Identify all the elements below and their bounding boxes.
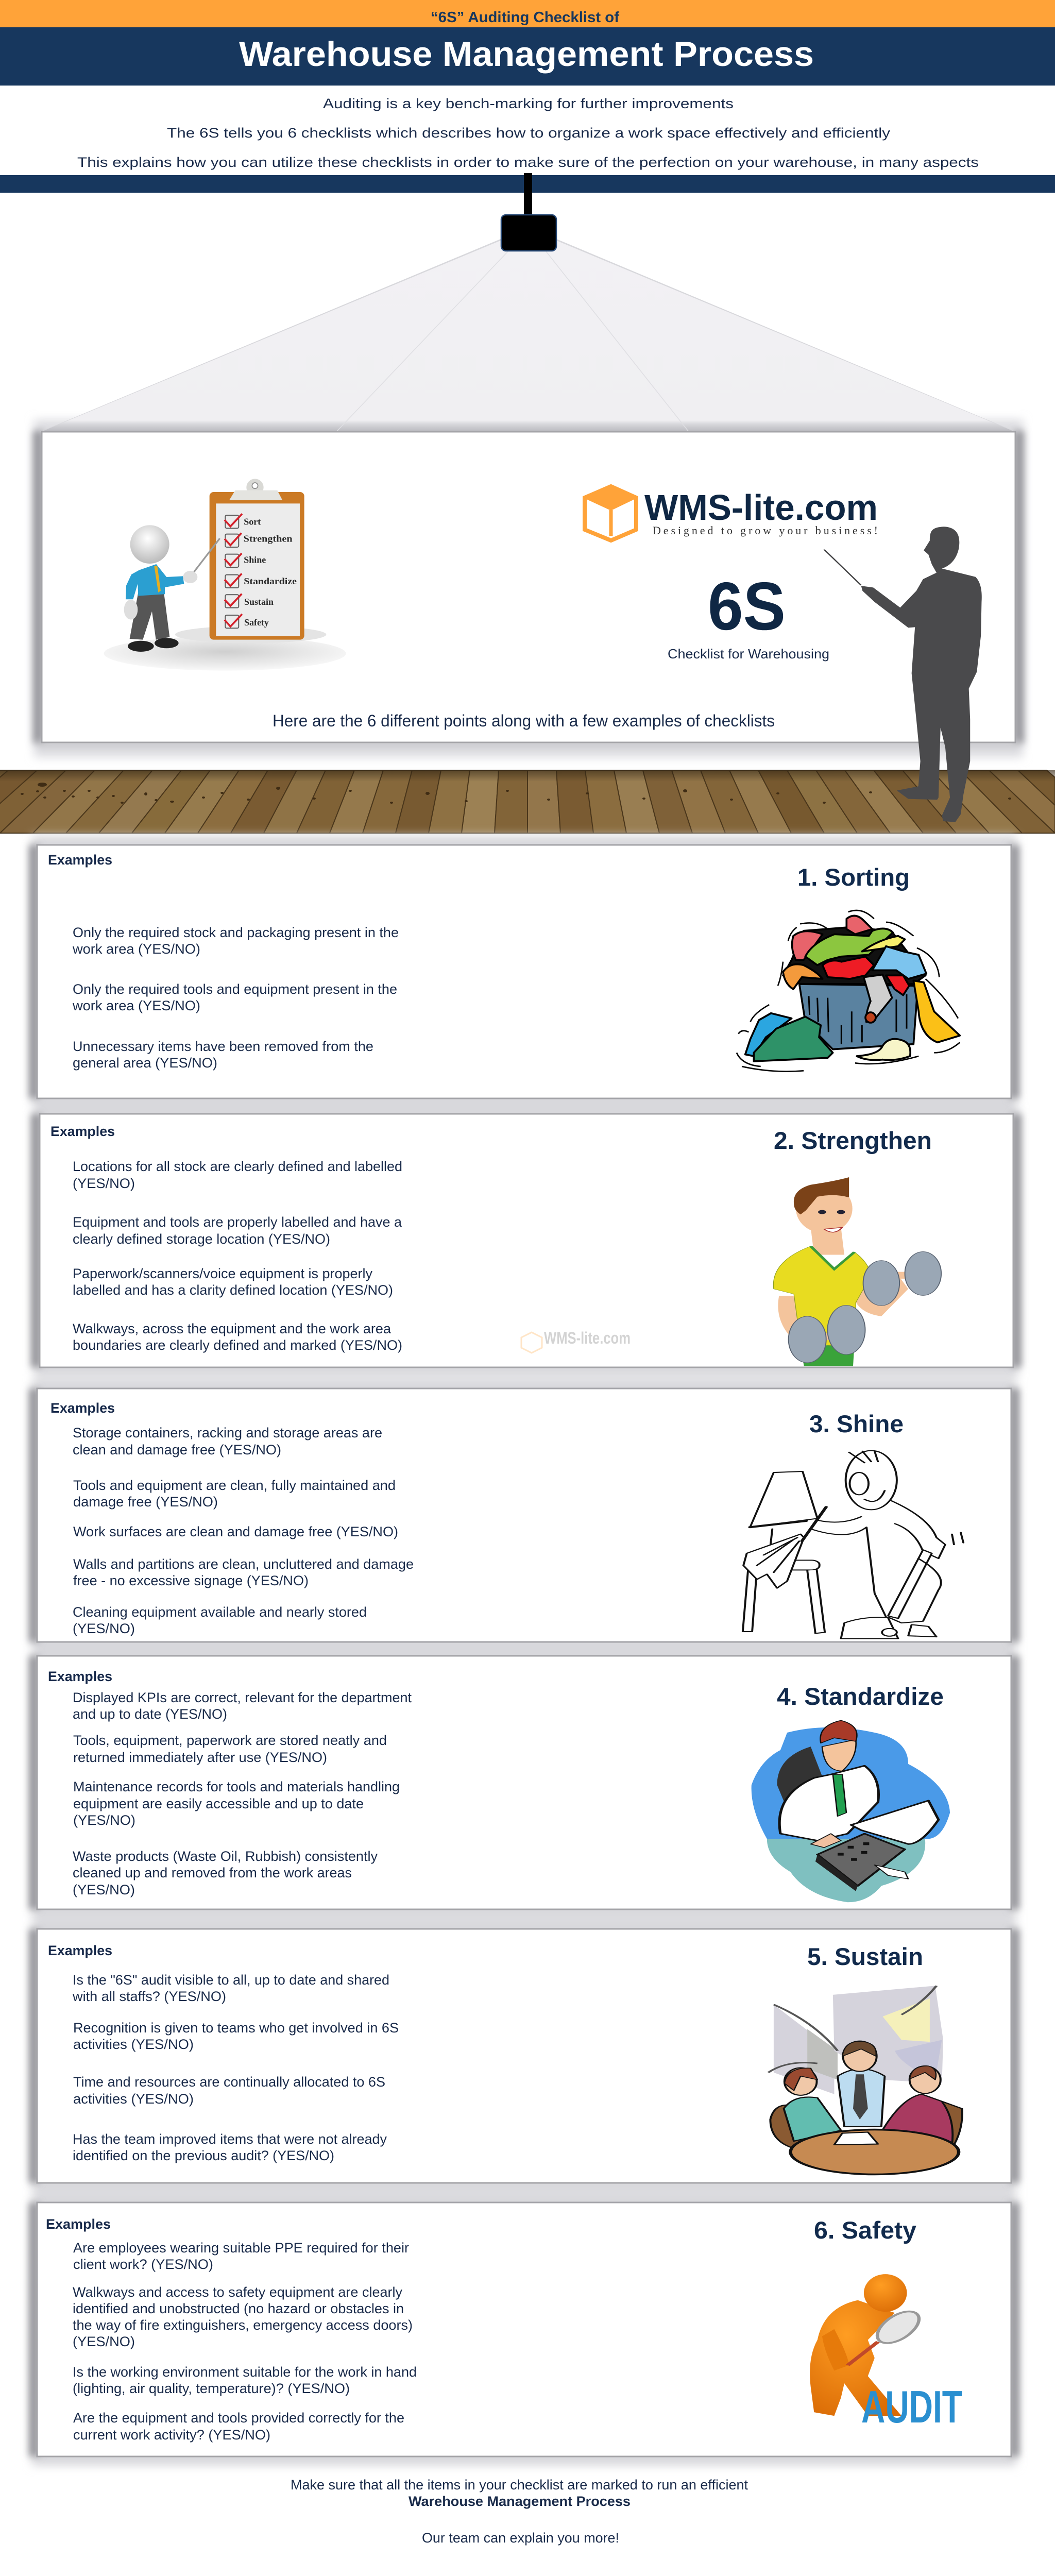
examples label: Examples: [48, 852, 112, 868]
checklist items: Displayed KPIs are correct, relevant for the department: [73, 1690, 412, 1705]
watermark logo: WMS-lite.com: [544, 1329, 631, 1347]
checklist items: Storage containers, racking and storage areas are: [73, 1425, 382, 1440]
panel: 4. Standardize: [37, 1656, 1011, 1909]
examples label: Examples: [46, 2216, 111, 2232]
checklist items: (YES/NO): [73, 1882, 135, 1897]
checklist items: [72, 925, 399, 1071]
checklist items: activities (YES/NO): [73, 2091, 194, 2107]
checklist items: and up to date (YES/NO): [73, 1706, 227, 1722]
illustration: figure with checklist: Safety: [244, 617, 269, 628]
AUDIT word: AUDIT: [861, 2381, 962, 2432]
illustration: laundry basket: [737, 910, 960, 1072]
checklist items: Work surfaces are clean and damage free (YES/NO): [73, 1524, 398, 1539]
panel: 5. Sustain: [37, 1929, 1011, 2183]
checklist items: returned immediately after use (YES/NO): [73, 1750, 327, 1765]
intro text: This explains how you can utilize these checklists in order to make sure of the perfection on your warehouse, in many aspects: [77, 155, 979, 170]
screen shadow: [33, 420, 1024, 757]
checklist items: clearly defined storage location (YES/NO): [73, 1231, 330, 1247]
checklist items: free - no excessive signage (YES/NO): [73, 1573, 309, 1588]
caption: checklist for warehousing: Checklist for Warehousing: [668, 646, 829, 662]
checklist items: (YES/NO): [73, 1621, 135, 1636]
panel: projection screen: [42, 432, 1015, 742]
logo: WMS-lite.com: Designed to grow your business!: [653, 524, 878, 537]
checklist items: general area (YES/NO): [73, 1055, 217, 1071]
illustration: figure with checklist: Sustain: [244, 597, 274, 607]
checklist items: Has the team improved items that were not already: [73, 2131, 387, 2147]
illustration: man lifting dumbbells: [773, 1177, 941, 1366]
silhouette: presenter with pointer: [824, 527, 982, 822]
checklist items: [73, 1159, 402, 1353]
checklist items: Recognition is given to teams who get involved in 6S: [73, 2020, 399, 2036]
checklist items: cleaned up and removed from the work areas: [73, 1865, 352, 1880]
wooden floor: [0, 770, 1055, 833]
illustration: cleaning figure: [743, 1450, 963, 1639]
panel: 2. Strengthen: [40, 1114, 1013, 1367]
intro text: Auditing is a key bench-marking for further improvements: [323, 96, 734, 111]
illustration: figure with checklist: [104, 479, 346, 671]
checklist items: damage free (YES/NO): [73, 1494, 218, 1510]
checklist items: [73, 1690, 412, 1897]
examples label: Examples: [50, 1400, 115, 1416]
checklist items: Waste products (Waste Oil, Rubbish) consistently: [73, 1849, 378, 1864]
checklist items: activities (YES/NO): [73, 2037, 194, 2052]
illustration: figure with checklist: Standardize: [244, 576, 297, 586]
heading: 5. Sustain: [807, 1943, 923, 1970]
checklist items: identified and unobstructed (no hazard or obstacles in: [73, 2301, 404, 2316]
checklist items: [73, 1425, 414, 1636]
illustration: figure with checklist: Strengthen: [244, 534, 293, 544]
checklist items: Locations for all stock are clearly defined and labelled: [73, 1159, 402, 1174]
closing text: Warehouse Management Process: [409, 2494, 631, 2509]
checklist items: client work? (YES/NO): [73, 2257, 213, 2272]
closing text: [291, 2477, 748, 2546]
checklist items: (YES/NO): [73, 2334, 135, 2349]
checklist items: Cleaning equipment available and nearly stored: [73, 1604, 367, 1620]
checklist items: equipment are easily accessible and up to date: [73, 1796, 364, 1811]
title banner: Warehouse Management Process: [239, 35, 814, 74]
checklist items: labelled and has a clarity defined location (YES/NO): [73, 1282, 393, 1298]
intro text: The 6S tells you 6 checklists which describes how to organize a work space effectively and efficiently: [167, 125, 891, 141]
checklist items: (YES/NO): [73, 1812, 135, 1828]
ceiling bar: [0, 175, 1055, 193]
illustration: man at desk: [752, 1720, 950, 1902]
checklist items: (YES/NO): [73, 1176, 135, 1191]
checklist items: Is the "6S" audit visible to all, up to date and shared: [73, 1972, 389, 1988]
heading: 1. Sorting: [797, 863, 910, 891]
top banner: orange subtitle: [0, 0, 1055, 27]
watermark logo: [521, 1329, 631, 1353]
intro text: [77, 96, 979, 170]
checklist items: work area (YES/NO): [72, 941, 200, 957]
checklist items: Tools and equipment are clean, fully maintained and: [73, 1478, 396, 1493]
checklist items: [73, 2240, 417, 2443]
checklist items: Are employees wearing suitable PPE required for their: [73, 2240, 409, 2256]
heading: 2. Strengthen: [774, 1127, 932, 1154]
panel: 6. Safety: [37, 2202, 1011, 2456]
checklist items: Walkways and access to safety equipment are clearly: [73, 2284, 403, 2300]
icon: projector: [501, 173, 556, 251]
checklist items: Is the working environment suitable for the work in hand: [73, 2364, 417, 2380]
heading: 3. Shine: [809, 1410, 904, 1437]
checklist items: Are the equipment and tools provided correctly for the: [73, 2410, 404, 2426]
checklist items: Equipment and tools are properly labelled and have a: [73, 1214, 402, 1230]
panel: 1. Sorting: [37, 845, 1011, 1098]
checklist items: [72, 1972, 399, 2163]
panel shadows: [29, 836, 1022, 2466]
examples label: Examples: [50, 1124, 115, 1139]
top banner: orange subtitle: “6S” Auditing Checklist of: [431, 9, 619, 26]
checklist items: current work activity? (YES/NO): [73, 2427, 270, 2443]
heading: 6. Safety: [814, 2216, 916, 2244]
checklist items: Only the required stock and packaging present in the: [73, 925, 399, 940]
logo: WMS-lite.com: [583, 484, 878, 540]
logo: WMS-lite.com: WMS-lite.com: [644, 487, 878, 528]
illustration: figure with checklist: Shine: [244, 555, 266, 565]
closing text: Our team can explain you more!: [422, 2530, 619, 2546]
title banner: [0, 27, 1055, 86]
checklist items: Only the required tools and equipment present in the: [73, 981, 397, 997]
checklist items: with all staffs? (YES/NO): [72, 1989, 226, 2004]
checklist items: identified on the previous audit? (YES/NO): [73, 2148, 334, 2163]
examples label: Examples: [48, 1943, 112, 1958]
checklist items: Time and resources are continually allocated to 6S: [73, 2074, 385, 2090]
illustration: team meeting: [768, 1986, 962, 2175]
checklist items: Unnecessary items have been removed from the: [73, 1039, 373, 1054]
illustration: orange figure with magnifier: [810, 2274, 962, 2432]
checklist items: clean and damage free (YES/NO): [73, 1442, 281, 1458]
text: 6 different points: Here are the 6 different points along with a few examples of checklists: [273, 711, 775, 730]
checklist items: Tools, equipment, paperwork are stored neatly and: [73, 1733, 387, 1748]
examples label: Examples: [48, 1669, 112, 1684]
6S heading: 6S: [708, 568, 786, 644]
checklist items: Walkways, across the equipment and the work area: [73, 1321, 391, 1336]
checklist items: Maintenance records for tools and materials handling: [73, 1779, 400, 1794]
checklist items: Walls and partitions are clean, uncluttered and damage: [73, 1556, 414, 1572]
checklist items: work area (YES/NO): [72, 998, 200, 1013]
checklist items: Paperwork/scanners/voice equipment is properly: [73, 1266, 373, 1281]
checklist items: the way of fire extinguishers, emergency access doors): [73, 2317, 413, 2333]
illustration: figure with checklist: Sort: [244, 516, 261, 527]
heading: 4. Standardize: [777, 1683, 944, 1710]
projection beam: [40, 239, 1016, 432]
checklist items: (lighting, air quality, temperature)? (YES/NO): [73, 2381, 350, 2396]
checklist items: boundaries are clearly defined and marked (YES/NO): [73, 1337, 402, 1353]
closing text: Make sure that all the items in your checklist are marked to run an efficient: [291, 2477, 748, 2493]
panel: 3. Shine: [37, 1388, 1011, 1642]
